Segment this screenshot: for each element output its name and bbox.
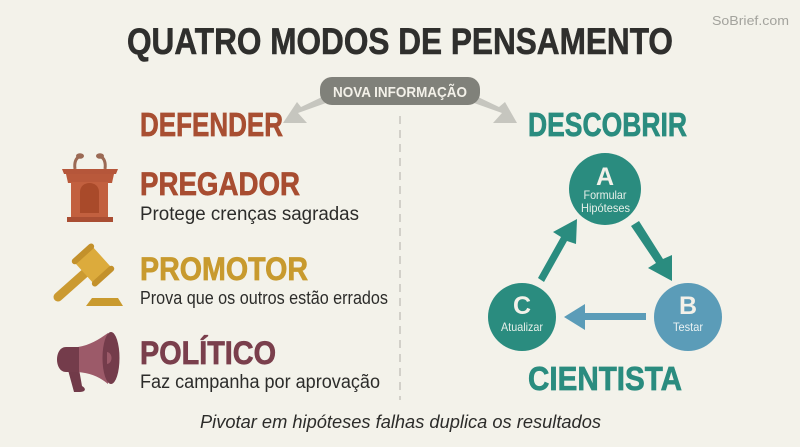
panel: politico: [57, 332, 380, 393]
node A: A: [596, 163, 614, 191]
panel: promotor: [58, 242, 388, 308]
node C: Atualizar: [501, 320, 543, 334]
arrow: A to B: [631, 221, 672, 281]
node A: [569, 153, 641, 225]
icon: megaphone: [57, 332, 120, 392]
pill: nova informação: [320, 77, 480, 105]
arrow: C to A: [538, 219, 577, 282]
arrow: to descobrir: [474, 97, 517, 123]
arrow: to defender: [283, 97, 326, 123]
chart: scientific cycle: [488, 153, 722, 351]
heading: descobrir: DESCOBRIR: [528, 106, 687, 143]
node A: Formular: [584, 188, 626, 202]
node B: B: [679, 292, 697, 320]
node B: [654, 283, 722, 351]
description: pregador: Protege crenças sagradas: [140, 204, 359, 225]
label: promotor: PROMOTOR: [140, 251, 308, 287]
description: promotor: Prova que os outros estão errados: [140, 288, 388, 308]
icon: gavel: [58, 242, 123, 306]
title: QUATRO MODOS DE PENSAMENTO: [127, 21, 673, 62]
arrow: B to C: [564, 304, 646, 330]
heading: defender: DEFENDER: [140, 106, 283, 143]
watermark: SoBrief.com: [712, 13, 789, 28]
label: cientista: CIENTISTA: [528, 360, 682, 397]
node C: C: [513, 292, 531, 320]
label: politico: POLÍTICO: [140, 335, 276, 371]
label: pregador: PREGADOR: [140, 166, 300, 202]
node C: [488, 283, 556, 351]
node A: Hipóteses: [581, 201, 630, 215]
panel: pregador: [62, 153, 359, 225]
pill: nova informação: NOVA INFORMAÇÃO: [333, 83, 467, 101]
node B: Testar: [673, 320, 703, 334]
footer note: Pivotar em hipóteses falhas duplica os resultados: [200, 412, 601, 432]
icon: podium: [62, 153, 118, 222]
description: politico: Faz campanha por aprovação: [140, 372, 380, 393]
